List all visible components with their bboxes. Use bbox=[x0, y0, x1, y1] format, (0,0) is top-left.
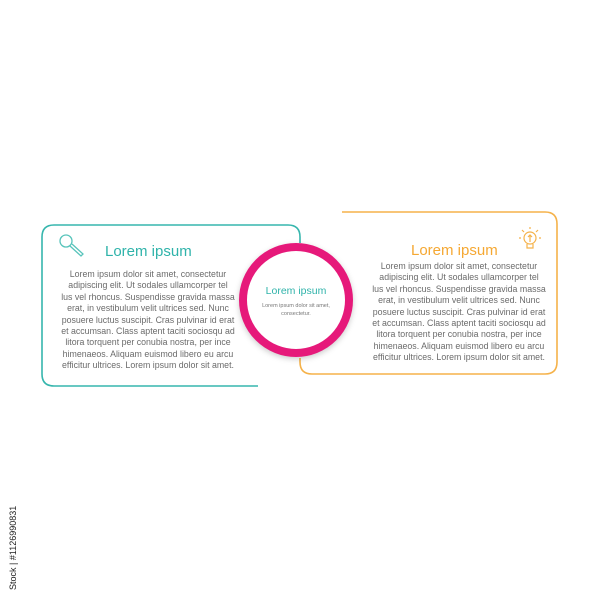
text block: right: efficitur ultrices. Lorem ipsum dolor sit amet. bbox=[373, 352, 545, 362]
text block: left: posuere luctus suscipit. Cras pulvinar id erat bbox=[62, 315, 234, 325]
text block: left: lus vel rhoncus. Suspendisse gravida massa bbox=[61, 292, 235, 302]
panel frame: right orange bbox=[300, 212, 557, 374]
heading: left: Lorem ipsum bbox=[105, 243, 192, 260]
text block: left bbox=[61, 269, 235, 370]
heading: right: Lorem ipsum bbox=[411, 242, 498, 259]
circle text bbox=[262, 285, 330, 317]
text block: right: posuere luctus suscipit. Cras pulvinar id erat bbox=[373, 307, 545, 317]
text block: left: Lorem ipsum dolor sit amet, consectetur bbox=[70, 269, 226, 279]
text block: right: litora torquent per conubia nostra, per ince bbox=[376, 329, 542, 339]
text block: right: erat, in vestibulum velit ultrices sed. Nunc bbox=[378, 295, 540, 305]
circle text: consectetur. bbox=[281, 311, 311, 317]
text block: left: efficitur ultrices. Lorem ipsum dolor sit amet. bbox=[62, 360, 234, 370]
text block: left: et accumsan. Class aptent taciti sociosqu ad bbox=[61, 326, 235, 336]
text block: right: adipiscing elit. Ut sodales ullamcorper tel bbox=[379, 272, 539, 282]
text block: left: litora torquent per conubia nostra, per ince bbox=[65, 337, 231, 347]
text block: right: lus vel rhoncus. Suspendisse gravida massa bbox=[372, 284, 546, 294]
text block: left: erat, in vestibulum velit ultrices sed. Nunc bbox=[67, 303, 229, 313]
text block: right: himenaeos. Aliquam euismod libero eu arcu bbox=[374, 341, 544, 351]
text block: right bbox=[372, 261, 546, 362]
text block: left: adipiscing elit. Ut sodales ullamcorper tel bbox=[68, 280, 228, 290]
text block: left: himenaeos. Aliquam euismod libero eu arcu bbox=[63, 349, 233, 359]
text block: right: et accumsan. Class aptent taciti sociosqu ad bbox=[372, 318, 546, 328]
circle ring bbox=[243, 247, 349, 353]
text block: right: Lorem ipsum dolor sit amet, consectetur bbox=[381, 261, 537, 271]
icon: magnifier bbox=[60, 235, 83, 256]
circle text: Lorem ipsum dolor sit amet, bbox=[262, 303, 330, 309]
panel frame: left teal bbox=[42, 225, 300, 386]
watermark id: Stock | #1126990831 bbox=[8, 506, 18, 590]
circle text: Lorem ipsum bbox=[266, 285, 326, 297]
icon: light bulb bbox=[519, 227, 541, 248]
